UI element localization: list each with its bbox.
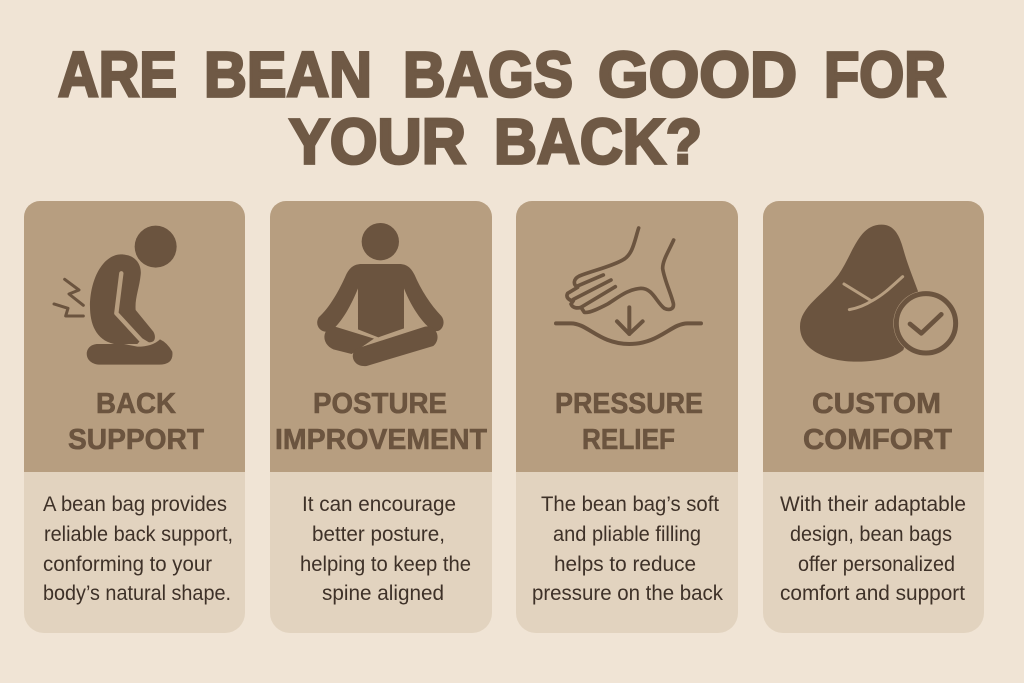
- text: pressure relief description: pressure on the back: [532, 581, 723, 605]
- text: custom comfort description: comfort and support: [780, 581, 965, 605]
- text: posture improvement description: spine aligned: [322, 581, 444, 605]
- heading: back support: [68, 388, 204, 456]
- text: posture improvement description: better posture,: [312, 522, 445, 546]
- heading: back support: BACK: [96, 388, 176, 420]
- heading: pressure relief: RELIEF: [582, 424, 675, 456]
- heading: posture improvement: [275, 388, 487, 456]
- text: pressure relief description: The bean bag’s soft: [541, 492, 719, 516]
- text: custom comfort description: With their adaptable: [780, 492, 966, 516]
- text: back support description: conforming to your: [43, 552, 212, 576]
- heading: back support: SUPPORT: [68, 424, 204, 456]
- icon: bean bag with check badge: [800, 225, 959, 362]
- heading: posture improvement: POSTURE: [313, 388, 447, 420]
- text: pressure relief description: [532, 492, 723, 605]
- title: FOR: [824, 39, 946, 111]
- panel: back support: [24, 201, 245, 633]
- text: back support description: [43, 492, 233, 605]
- panel: pressure relief: [516, 201, 738, 633]
- heading: custom comfort: [803, 388, 952, 456]
- panel: custom comfort: [763, 201, 984, 633]
- text: pressure relief description: helps to reduce: [554, 552, 696, 576]
- title: BAGS: [403, 39, 573, 111]
- icon: person sitting cross-legged: [317, 223, 444, 366]
- text: posture improvement description: It can encourage: [302, 492, 456, 516]
- text: custom comfort description: design, bean bags: [790, 522, 952, 546]
- title: GOOD: [598, 39, 797, 111]
- text: custom comfort description: offer personalized: [798, 552, 955, 576]
- title: [58, 39, 946, 178]
- heading: custom comfort: CUSTOM: [812, 388, 941, 420]
- title: BACK?: [494, 106, 702, 178]
- panel: posture improvement: [270, 201, 492, 633]
- icon: person bent over with back pain: [54, 226, 177, 365]
- text: pressure relief description: and pliable filling: [553, 522, 701, 546]
- text: back support description: reliable back support,: [44, 522, 233, 546]
- text: posture improvement description: [300, 492, 471, 605]
- heading: pressure relief: [555, 388, 703, 456]
- title: YOUR: [289, 106, 466, 178]
- text: back support description: A bean bag provides: [43, 492, 227, 516]
- icon: hand pressing on cushion: [556, 228, 701, 344]
- title: BEAN: [204, 39, 372, 111]
- heading: custom comfort: COMFORT: [803, 424, 952, 456]
- text: posture improvement description: helping to keep the: [300, 552, 471, 576]
- title: ARE: [58, 39, 177, 111]
- heading: pressure relief: PRESSURE: [555, 388, 703, 420]
- text: custom comfort description: [780, 492, 966, 605]
- heading: posture improvement: IMPROVEMENT: [275, 424, 487, 456]
- text: back support description: body’s natural shape.: [43, 581, 231, 605]
